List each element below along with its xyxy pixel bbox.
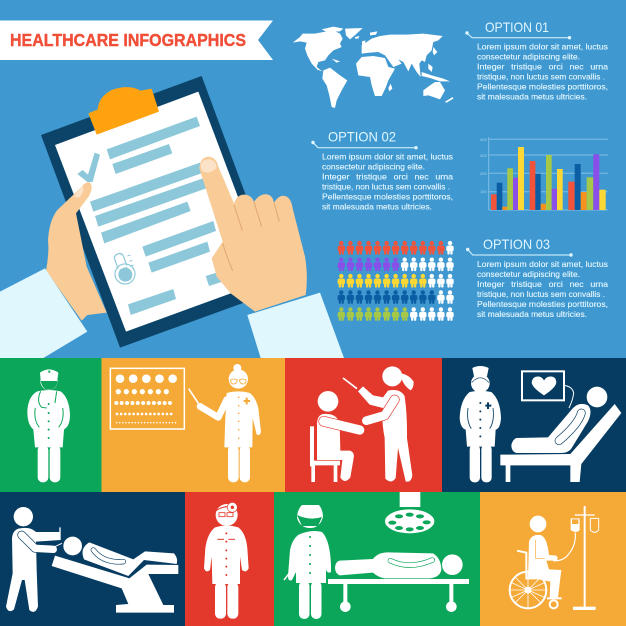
left sleeve	[0, 268, 87, 358]
chair	[310, 426, 340, 482]
text block: option 03: Lorem ipsum dolor sit amet, luctus	[477, 259, 608, 269]
title banner	[0, 20, 273, 60]
patient on bed	[587, 387, 607, 407]
text block: option 03	[477, 259, 608, 319]
nurse	[382, 366, 402, 386]
panel: doctor with stethoscope	[0, 358, 102, 492]
text block: option 01: Integer tristique orci nec urna	[477, 62, 608, 72]
heading: option 03: OPTION 03	[483, 236, 550, 252]
text block: option 03: tristique, non luctus sem convallis .	[477, 289, 605, 299]
right sleeve	[247, 293, 344, 358]
nurse	[472, 366, 489, 376]
text lines on form	[90, 117, 223, 315]
row: green 8 of 13	[338, 307, 454, 321]
right fingernail	[201, 159, 217, 172]
orange clip	[88, 87, 159, 135]
text block: option 03: consectetur adipiscing elite.	[477, 269, 580, 279]
icon: heart monitor	[522, 371, 564, 400]
icon: check mark	[77, 153, 100, 182]
bars	[491, 147, 606, 210]
axis labels: 200	[480, 171, 487, 176]
heading: option 01	[465, 19, 571, 39]
text block: option 01: sit malesuada metus ultricies.	[477, 92, 587, 102]
text block: option 01	[477, 42, 608, 102]
text block: option 02: consectetur adipiscing elite.	[322, 162, 425, 172]
text block: option 01: Pellentesque molesties porttitoros,	[477, 82, 608, 92]
paper sheet	[55, 92, 269, 332]
panel: doctor with head mirror	[185, 492, 274, 626]
text block: option 01: Lorem ipsum dolor sit amet, luctus	[477, 42, 608, 52]
right hand	[199, 157, 307, 312]
heading: option 02	[311, 129, 418, 149]
teacher figure	[189, 389, 198, 403]
axis labels	[480, 137, 487, 194]
left thumbnail	[74, 185, 84, 198]
people pictogram chart	[338, 241, 454, 321]
heading: option 01: OPTION 01	[485, 19, 549, 35]
icon: thermometer	[108, 251, 138, 287]
text block: option 02: tristique, non luctus sem convallis .	[322, 182, 450, 192]
syringe	[343, 378, 357, 389]
text block: option 02: Lorem ipsum dolor sit amet, luctus	[322, 152, 453, 162]
panel: nurse and patient with heart monitor	[442, 358, 626, 492]
eye chart board	[110, 368, 184, 429]
panel: nurse giving injection	[285, 358, 442, 492]
text block: option 03: Pellentesque molesties porttitoros,	[477, 299, 608, 309]
panel: dentist and patient	[0, 492, 185, 626]
text block: option 03: sit malesuada metus ultricies.	[477, 309, 587, 319]
heading: option 03	[466, 236, 573, 257]
patient on table	[442, 554, 463, 575]
text block: option 01: tristique, non luctus sem convallis .	[477, 72, 605, 82]
wheelchair	[517, 551, 551, 578]
finger creases	[223, 202, 279, 271]
IV stand	[584, 506, 586, 608]
heading: option 02: OPTION 02	[328, 129, 396, 145]
world map	[293, 27, 453, 108]
text block: option 03: Integer tristique orci nec urna	[477, 279, 608, 289]
text block: option 01: consectetur adipiscing elite.	[477, 52, 580, 62]
row: yellow 10 of 13	[338, 274, 454, 288]
text block: option 02	[322, 152, 453, 212]
surgical lamp	[400, 492, 420, 507]
surgeon	[284, 505, 331, 619]
row: purple 7 of 13	[338, 258, 454, 271]
row: red 12 of 13	[338, 241, 454, 255]
left hand	[46, 182, 107, 321]
panel: blue header background	[0, 0, 626, 358]
axis labels: 300	[480, 153, 487, 158]
panel: operating room	[274, 492, 480, 626]
text block: option 02: Pellentesque molesties porttitoros,	[322, 192, 453, 202]
panel: wheelchair patient with IV drip	[480, 492, 626, 626]
dental chair	[52, 556, 178, 613]
clipboard illustration	[0, 76, 344, 358]
axis labels: 400	[480, 137, 487, 142]
seated patient	[318, 391, 338, 412]
text block: option 02: Integer tristique orci nec urna	[322, 172, 453, 182]
patient	[63, 537, 82, 555]
dentist	[14, 507, 33, 526]
patient	[530, 516, 546, 532]
axis labels: 100	[480, 189, 487, 194]
row: blue 11 of 13	[338, 290, 454, 304]
text block: option 02: sit malesuada metus ultricies.	[322, 202, 432, 212]
panel: teacher with eye chart	[102, 358, 285, 492]
clipboard board	[41, 76, 281, 348]
bar chart	[480, 137, 608, 210]
title banner: HEALTHCARE INFOGRAPHICS	[10, 30, 246, 50]
